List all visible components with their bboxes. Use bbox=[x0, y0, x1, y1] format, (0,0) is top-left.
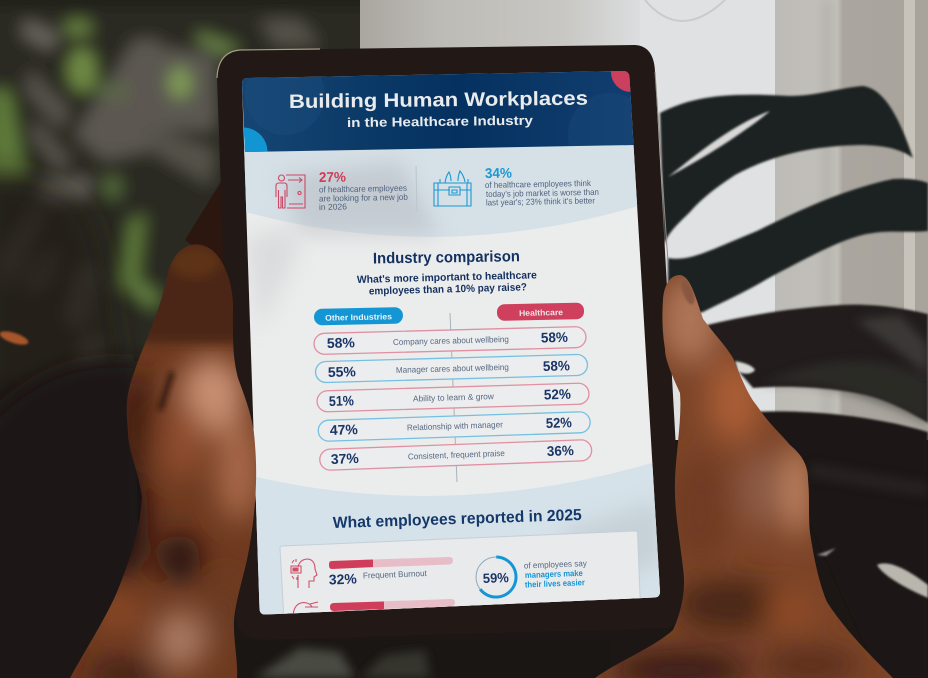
panel: reported stats card bbox=[280, 531, 641, 620]
description: last year's; 23% think it's better bbox=[486, 195, 595, 207]
question: What's more important to healthcare bbox=[357, 269, 537, 286]
second bar track bbox=[330, 599, 455, 611]
comparison row: company cares: Company cares about wellbeing bbox=[393, 334, 509, 347]
comparison row: manager cares bbox=[315, 354, 588, 383]
speck bbox=[817, 548, 836, 556]
divider bbox=[416, 166, 417, 212]
manager text: managers make bbox=[525, 568, 583, 580]
comparison row: company cares: 58% bbox=[541, 329, 569, 345]
value: 27% bbox=[319, 169, 347, 185]
second bar fill bbox=[330, 602, 384, 611]
description: are looking for a new job bbox=[319, 192, 408, 203]
bottom blue section bbox=[250, 462, 670, 620]
leaf 1 bbox=[660, 86, 913, 245]
monstera leaves on the right bbox=[660, 86, 928, 678]
photo background: white curtains bbox=[360, 0, 928, 440]
tablet screen bbox=[218, 52, 680, 630]
manager text: of employees say bbox=[524, 558, 588, 570]
stat: looking for a new job bbox=[276, 169, 408, 212]
icon: person at door bbox=[276, 175, 305, 208]
legend pill: other industries: Other Industries bbox=[325, 312, 393, 323]
comparison row: relationship with manager: Relationship with manager bbox=[407, 419, 503, 432]
comparison row: relationship with manager bbox=[318, 411, 590, 442]
header banner bbox=[242, 71, 634, 152]
slit in leaf 3 bbox=[735, 361, 755, 374]
ring chart: 59 percent bbox=[476, 555, 519, 600]
question bbox=[357, 269, 537, 297]
subtitle: in the Healthcare Industry bbox=[347, 113, 534, 130]
section heading: what employees reported: What employees reported in 2025 bbox=[333, 507, 582, 532]
slit in leaf 1 bbox=[668, 111, 770, 177]
description: in 2026 bbox=[319, 201, 347, 212]
comparison row: learn and grow: 51% bbox=[329, 392, 355, 409]
comparison row: learn and grow bbox=[317, 383, 589, 412]
description: today's job market is worse than bbox=[486, 187, 599, 199]
leaf 3 bbox=[707, 305, 928, 423]
tablet body bbox=[217, 45, 683, 640]
left hand holding tablet bbox=[70, 244, 256, 678]
icon: second head bbox=[292, 602, 318, 614]
comparison row: manager cares: 58% bbox=[543, 357, 571, 374]
burnout value: 32% bbox=[329, 570, 358, 587]
icon: head with battery bbox=[291, 559, 317, 588]
leaf 2 bbox=[668, 179, 928, 320]
comparison row: frequent praise bbox=[319, 440, 592, 470]
finger behind tablet bbox=[185, 180, 226, 270]
description: of healthcare employees bbox=[319, 183, 407, 194]
title: Building Human Workplaces bbox=[289, 88, 588, 113]
comparison row: relationship with manager: 52% bbox=[546, 414, 573, 431]
light gaps in the leaves bbox=[668, 111, 928, 598]
burnout bar fill bbox=[329, 560, 373, 569]
stat: job market bbox=[434, 165, 599, 207]
right hand holding tablet bbox=[590, 270, 900, 678]
question: employees than a 10% pay raise? bbox=[369, 281, 527, 297]
legend pill: other industries bbox=[314, 307, 403, 325]
comparison row: frequent praise: 36% bbox=[547, 442, 575, 459]
decorative red circle bbox=[611, 71, 630, 92]
thumb in shade bbox=[144, 244, 234, 348]
comparison row: frequent praise: 37% bbox=[331, 450, 360, 467]
section heading: industry comparison: Industry comparison bbox=[373, 248, 520, 267]
lower leaf mass bbox=[755, 411, 928, 678]
soft window shadows bbox=[248, 159, 658, 572]
center axis line bbox=[450, 313, 457, 482]
comparison row: company cares bbox=[314, 326, 586, 355]
legend pill: healthcare: Healthcare bbox=[519, 308, 564, 318]
description bbox=[319, 183, 408, 212]
description bbox=[485, 178, 599, 207]
ring chart: 59 percent: 59% bbox=[483, 570, 509, 586]
stats band bbox=[240, 143, 642, 237]
description: of healthcare employees think bbox=[485, 178, 592, 190]
comparison row: frequent praise: Consistent, frequent praise bbox=[408, 448, 505, 461]
manager text bbox=[524, 561, 587, 588]
decorative cyan circle bbox=[244, 128, 268, 152]
manager text: their lives easier bbox=[525, 577, 586, 589]
comparison row: learn and grow: Ability to learn & grow bbox=[413, 391, 495, 403]
burnout label: Frequent Burnout bbox=[363, 568, 428, 580]
comparison row: manager cares: 55% bbox=[328, 363, 357, 380]
legend pill: healthcare bbox=[497, 303, 584, 321]
burnout bar track bbox=[329, 557, 453, 569]
hole in lower leaf bbox=[877, 563, 928, 598]
comparison row: learn and grow: 52% bbox=[544, 386, 572, 402]
comparison row: company cares: 58% bbox=[327, 334, 356, 351]
value: 34% bbox=[485, 165, 513, 181]
icon: briefcase bbox=[434, 171, 471, 206]
comparison row: manager cares: Manager cares about wellbeing bbox=[396, 362, 509, 375]
comparison row: relationship with manager: 47% bbox=[330, 421, 359, 438]
